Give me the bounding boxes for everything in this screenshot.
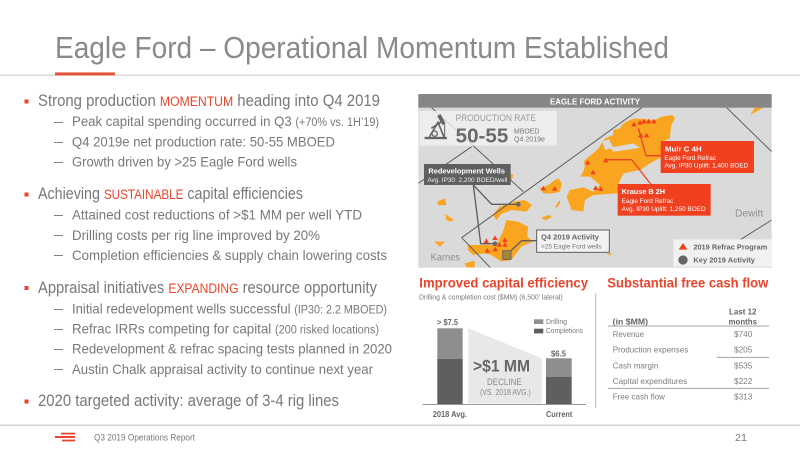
callout: Q4 2019 activity xyxy=(503,230,609,259)
production rate box: PRODUCTION RATE xyxy=(456,113,536,123)
chart legend: Completions xyxy=(546,326,583,335)
callout: redevelopment wells: Redevelopment Wells xyxy=(428,166,505,175)
callout: Muir C 4H xyxy=(638,128,754,173)
map legend: 2019 Refrac Program xyxy=(693,243,768,252)
bullet: 2020 targeted activity: 2020 targeted activity: average of 3-4 rig lines xyxy=(38,392,339,410)
chart subtitle: Drilling & completion cost ($MM) (6,500’ lateral) xyxy=(419,293,563,302)
bar chart: drilling and completion cost xyxy=(423,317,586,419)
decline wedge callout xyxy=(468,328,542,404)
callout: redevelopment wells xyxy=(424,164,511,185)
title: Eagle Ford – Operational Momentum Established xyxy=(55,30,669,65)
callout: Krause B 2H: Avg. IP30 Uplift: 1,250 BOED xyxy=(622,206,706,213)
table: free cash flow: $222 xyxy=(734,376,753,386)
table: free cash flow: Revenue xyxy=(613,329,644,339)
bullet group: capital efficiencies: Attained cost reductions of >$1 MM per well YTD xyxy=(72,206,362,222)
bullet group: capital efficiencies xyxy=(24,185,387,263)
table: free cash flow xyxy=(608,307,769,401)
table: free cash flow: Last 12 xyxy=(729,307,757,316)
chart legend xyxy=(534,317,583,335)
production rate box xyxy=(419,111,557,147)
production rate box: MBOED xyxy=(514,127,539,136)
footer text: Q3 2019 Operations Report xyxy=(94,433,195,443)
callout: Krause B 2H: Krause B 2H xyxy=(622,187,665,196)
table: free cash flow: $535 xyxy=(734,360,753,370)
table: free cash flow: $740 xyxy=(734,329,753,339)
heading: substantial free cash flow: Substantial free cash flow xyxy=(607,275,769,290)
bullet group: appraisal initiatives: Refrac IRRs competing for capital (200 risked locations) xyxy=(72,320,379,336)
callout: Muir C 4H: Avg. IP30 Uplift: 1,400 BOED xyxy=(664,163,749,170)
map legend: Key 2019 Activity xyxy=(693,256,756,265)
panel: Eagle Ford activity map xyxy=(418,94,772,269)
title rule with red accent xyxy=(0,72,800,76)
table: free cash flow: Cash margin xyxy=(613,360,659,370)
bullet group: appraisal initiatives xyxy=(24,279,392,377)
bar: 2018 average xyxy=(433,318,467,419)
callout: Muir C 4H: Eagle Ford Refrac xyxy=(664,155,717,162)
decline wedge callout: >$1 MM xyxy=(473,357,530,376)
refrac triangles xyxy=(484,119,657,253)
decline wedge callout: (VS. 2018 AVG.) xyxy=(480,388,531,397)
callout: Krause B 2H xyxy=(605,160,711,216)
table: free cash flow: Production expenses xyxy=(613,345,688,355)
bullet group: momentum: Q4 2019e net production rate: 50-55 MBOED xyxy=(72,134,335,150)
key activity connector lines xyxy=(473,185,521,246)
table: free cash flow: $205 xyxy=(734,345,753,355)
table: free cash flow: months xyxy=(728,318,757,327)
table: free cash flow: (in $MM) xyxy=(613,318,648,327)
page number: 21 xyxy=(735,432,747,444)
bar: 2018 average: > $7.5 xyxy=(437,318,459,327)
bullet group: momentum: Strong production MOMENTUM heading into Q4 2019 xyxy=(38,92,380,110)
heading: improved capital efficiency: Improved capital efficiency xyxy=(419,275,588,290)
bullet group: capital efficiencies: Achieving SUSTAINABLE capital efficiencies xyxy=(38,185,303,203)
callout: Q4 2019 activity: Q4 2019 Activity xyxy=(541,232,600,241)
map legend xyxy=(673,239,772,267)
callout: redevelopment wells: Avg. IP30: 2,200 BOED/well xyxy=(427,177,508,184)
bullet group: appraisal initiatives: Initial redevelopment wells successful (IP30: 2.2 MBOED) xyxy=(72,300,387,316)
county label: Karnes: Karnes xyxy=(431,253,460,264)
table: free cash flow: $313 xyxy=(734,391,753,401)
bullet group: appraisal initiatives: Appraisal initiatives EXPANDING resource opportunity xyxy=(38,279,378,297)
production rate box: Q4 2019e xyxy=(514,135,545,144)
bar: current: Current xyxy=(546,410,573,419)
map header xyxy=(418,94,772,108)
bullet group: momentum: Peak capital spending occurred in Q3 (+70% vs. 1H’19) xyxy=(72,113,379,129)
decline wedge callout: DECLINE xyxy=(487,377,522,388)
bullet group: capital efficiencies: Completion efficiencies & supply chain lowering costs xyxy=(72,247,387,263)
chart legend: Drilling xyxy=(546,317,567,326)
bar: current xyxy=(546,349,573,419)
bar: current: $6.5 xyxy=(551,349,567,358)
table: free cash flow: Capital expenditures xyxy=(613,376,687,386)
county label: Dewitt: Dewitt xyxy=(735,208,764,219)
icon: pumpjack xyxy=(425,114,447,139)
bullet group: appraisal initiatives: Redevelopment & refrac spacing tests planned in 2020 xyxy=(72,340,392,356)
bullet list xyxy=(24,92,392,410)
callout: Muir C 4H: Muir C 4H xyxy=(665,145,702,154)
bullet group: appraisal initiatives: Austin Chalk appraisal activity to continue next year xyxy=(72,361,373,377)
map header: EAGLE FORD ACTIVITY xyxy=(550,96,640,106)
bullet group: momentum: Growth driven by >25 Eagle Ford wells xyxy=(72,154,297,170)
bullet group: capital efficiencies: Drilling costs per rig line improved by 20% xyxy=(72,227,320,243)
callout: Krause B 2H: Eagle Ford Refrac xyxy=(622,198,674,205)
production rate box: 50-55 xyxy=(456,124,508,147)
callout: Q4 2019 activity: >25 Eagle Ford wells xyxy=(541,243,602,250)
footer logo xyxy=(55,433,75,441)
bullet group: momentum xyxy=(24,92,380,170)
table: free cash flow: Free cash flow xyxy=(613,391,666,401)
orange acreage xyxy=(434,108,763,267)
bar: 2018 average: 2018 Avg. xyxy=(433,410,467,419)
